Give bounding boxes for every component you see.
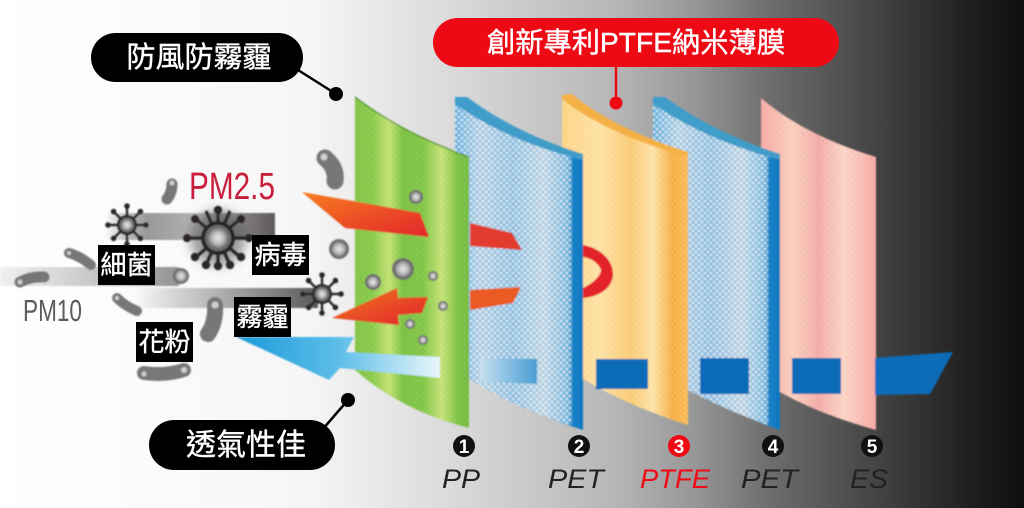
layer 1: PP green panel bbox=[355, 97, 469, 428]
airflow segment on PTFE bbox=[596, 359, 648, 389]
tag: pollen: 花粉 bbox=[138, 327, 191, 357]
layer label 5: ES: 5 bbox=[867, 437, 878, 458]
callout: windproof and haze-proof: 防風防霧霾 bbox=[126, 41, 272, 74]
layer label 2: PET bbox=[548, 435, 607, 494]
virus icon: large centre bbox=[183, 206, 253, 270]
layer label 2: PET: PET bbox=[548, 464, 607, 494]
layer label 4: PET: PET bbox=[741, 464, 801, 494]
callout: windproof and haze-proof bbox=[91, 33, 343, 101]
layer 4: PET blue panel bbox=[653, 97, 780, 430]
red arrow: return on PET bbox=[470, 287, 521, 310]
layer label 3: PTFE: PTFE bbox=[640, 464, 711, 494]
airflow segment on ES bbox=[792, 358, 841, 394]
red arrow: loop at PTFE bbox=[583, 245, 613, 298]
layer label 4: PET bbox=[741, 435, 801, 494]
blue airflow arrow bbox=[236, 337, 440, 380]
layer label 5: ES: ES bbox=[850, 464, 888, 494]
tag: virus: 病毒 bbox=[254, 240, 307, 270]
layer label 3: PTFE: 3 bbox=[674, 437, 684, 458]
PM10 particle band bbox=[0, 267, 187, 286]
layer label 2: PET: 2 bbox=[574, 437, 584, 458]
layer label 1: PP: 1 bbox=[459, 437, 470, 458]
virus icon: small left bbox=[105, 203, 149, 247]
haze particle band bbox=[133, 288, 318, 308]
callout: breathable bbox=[149, 393, 355, 470]
layer 3: PTFE orange panel bbox=[562, 94, 688, 425]
tag: haze: 霧霾 bbox=[236, 302, 289, 332]
airflow exit arrow bbox=[875, 352, 953, 395]
layer label 1: PP: PP bbox=[442, 464, 480, 494]
particles trapped in PP layer bbox=[365, 190, 448, 345]
airflow segment on PET bbox=[480, 358, 537, 384]
bacteria particles bbox=[20, 158, 335, 374]
bacteria highlights bbox=[18, 154, 328, 376]
callout: patented PTFE membrane: 創新專利PTFE納米薄膜 bbox=[487, 27, 785, 58]
layer label 5: ES bbox=[850, 435, 888, 494]
red arrow: continuation on PET bbox=[470, 223, 522, 250]
tag: pollen bbox=[136, 322, 193, 362]
airflow segment on PET 2 bbox=[700, 358, 749, 394]
filter layers diagram bbox=[0, 94, 953, 430]
tag: bacteria bbox=[98, 245, 155, 285]
layer 2: PET blue panel bbox=[455, 97, 583, 430]
layer 5: ES pink panel bbox=[761, 98, 876, 430]
layer label 1: PP bbox=[442, 435, 480, 494]
tag: bacteria: 細菌 bbox=[100, 250, 153, 280]
round particles bbox=[173, 239, 349, 284]
tag: virus bbox=[252, 235, 309, 275]
layer label 3: PTFE bbox=[640, 435, 711, 494]
callout: patented PTFE membrane bbox=[433, 18, 839, 110]
callout: breathable: 透氣性佳 bbox=[186, 429, 306, 462]
layer label 4: PET: 4 bbox=[768, 437, 779, 458]
virus particle band bbox=[105, 213, 275, 240]
PM2.5 label: PM2.5 bbox=[189, 166, 275, 208]
PM10 label: PM10 bbox=[23, 293, 82, 328]
red arrow: outgoing through PP bbox=[332, 288, 428, 325]
red arrow: incoming through PP bbox=[302, 192, 429, 237]
virus icon: small right bbox=[300, 272, 344, 316]
tag: haze bbox=[234, 297, 291, 337]
